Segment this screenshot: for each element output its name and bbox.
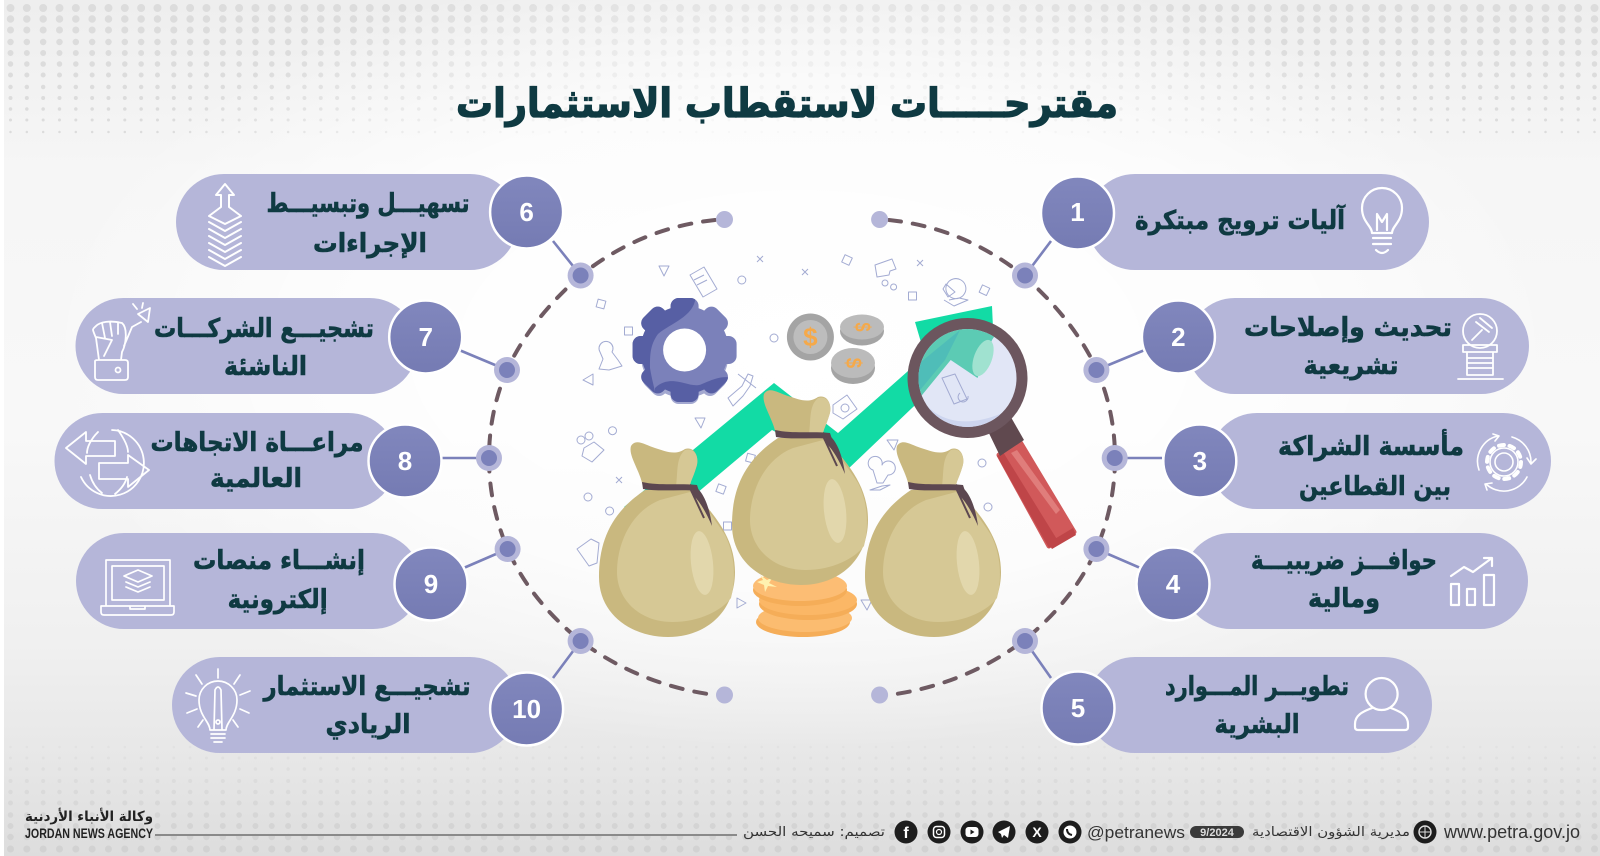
social icons: f <box>903 825 909 842</box>
footer: globe icon <box>1414 820 1436 844</box>
item 8: 8 <box>398 446 412 476</box>
footer: agency logo text: JORDAN NEWS AGENCY <box>25 825 153 841</box>
icon: globe with exchange arrows <box>66 430 149 496</box>
footer: date badge <box>1190 826 1244 839</box>
item 9: إلكترونية <box>228 585 328 615</box>
footer: agency logo text: وكالة الأنباء الأردنية <box>25 808 153 825</box>
item 4: ومالية <box>1308 584 1380 614</box>
item 10: 10 <box>512 694 541 724</box>
footer: department: مديرية الشؤون الاقتصادية <box>1252 825 1410 840</box>
green growth arrow <box>624 306 994 518</box>
silver dollar coins <box>787 314 884 384</box>
magnifying glass <box>908 300 1076 549</box>
item 5: البشرية <box>1214 710 1300 740</box>
item 3 <box>1163 413 1551 509</box>
money bag centre <box>732 390 868 585</box>
decorative line icons around illustration <box>577 255 992 610</box>
item 9: 9 <box>424 569 438 599</box>
dashed ring: left arc <box>489 220 715 695</box>
item 2: 2 <box>1171 322 1186 352</box>
icon: laptop with layers <box>101 560 174 615</box>
item 3: 3 <box>1193 446 1207 476</box>
silver dollar coins: $ <box>803 322 818 352</box>
footer rule <box>155 834 737 836</box>
footer: date badge: 9/2024 <box>1200 827 1235 839</box>
stack of orange coins <box>753 571 857 637</box>
item 5: تطويـــر المـــوارد <box>1165 672 1349 702</box>
item 6: 6 <box>519 197 534 227</box>
item 10 <box>172 657 563 753</box>
title: مقترحـــــات لاستقطاب الاستثمارات <box>456 81 1118 127</box>
icon: light bulb <box>1362 188 1402 253</box>
item 6: تسهيـــل وتبسيـــط <box>266 189 470 219</box>
icon: gavel and pedestal <box>1458 314 1503 379</box>
ring node dots <box>476 262 1128 654</box>
footer: agency logo text <box>25 808 153 841</box>
item 5 <box>1042 657 1432 753</box>
item 8: مراعـــاة الاتجاهات <box>150 428 364 458</box>
item 9 <box>76 533 468 629</box>
item 7: 7 <box>418 322 433 352</box>
item 1: 1 <box>1070 197 1085 227</box>
item 7: تشجيـــع الشركـــات <box>154 314 374 344</box>
item 4: حوافـــز ضريبيـــة <box>1251 546 1437 576</box>
money bag left <box>599 442 735 637</box>
gear icon <box>632 298 737 404</box>
dashed ring: right arc <box>889 220 1115 695</box>
item 4: 4 <box>1166 569 1181 599</box>
item 2: تحديث وإصلاحات <box>1244 313 1452 343</box>
item 7: الناشئة <box>224 352 307 382</box>
silver dollar coins: $ <box>841 358 864 369</box>
item 1 <box>1041 174 1429 270</box>
item 8: العالمية <box>210 464 302 494</box>
footer: designer credit: تصميم: سميحه الحسن <box>743 825 885 840</box>
icon: stacked layers with up arrow <box>209 184 241 266</box>
item 6 <box>176 174 563 270</box>
silver dollar coins: $ <box>849 322 874 332</box>
icon: bulb with rays <box>186 669 250 742</box>
footer: handle: @petranews <box>1087 823 1185 842</box>
item 2 <box>1142 298 1529 394</box>
item 10: الريادي <box>326 710 410 740</box>
item 6: الإجراءات <box>313 229 427 259</box>
item 4 <box>1136 533 1528 629</box>
icon: person <box>1355 678 1408 730</box>
ring end dots <box>716 211 888 704</box>
item 9: إنشـــاء منصات <box>193 546 365 576</box>
icon: fist with rising arrow <box>93 303 150 380</box>
item 3: مأسسة الشراكة <box>1278 429 1464 462</box>
money bag right <box>865 442 1001 637</box>
connector lines <box>441 241 1162 678</box>
item 3: بين القطاعين <box>1299 472 1451 502</box>
social icons <box>894 820 1082 844</box>
icon: bar chart with rising arrow <box>1451 558 1494 605</box>
social icons: X <box>1032 824 1042 840</box>
footer: website: www.petra.gov.jo <box>1443 822 1580 842</box>
item 8 <box>54 413 442 509</box>
item 10: تشجيـــع الاستثمار <box>262 672 470 702</box>
item 1: آليات ترويج مبتكرة <box>1135 204 1346 236</box>
icon: gear with cycle arrows <box>1478 434 1536 491</box>
item 5: 5 <box>1071 693 1085 723</box>
item 7 <box>76 298 462 394</box>
item 2: تشريعية <box>1304 351 1398 381</box>
